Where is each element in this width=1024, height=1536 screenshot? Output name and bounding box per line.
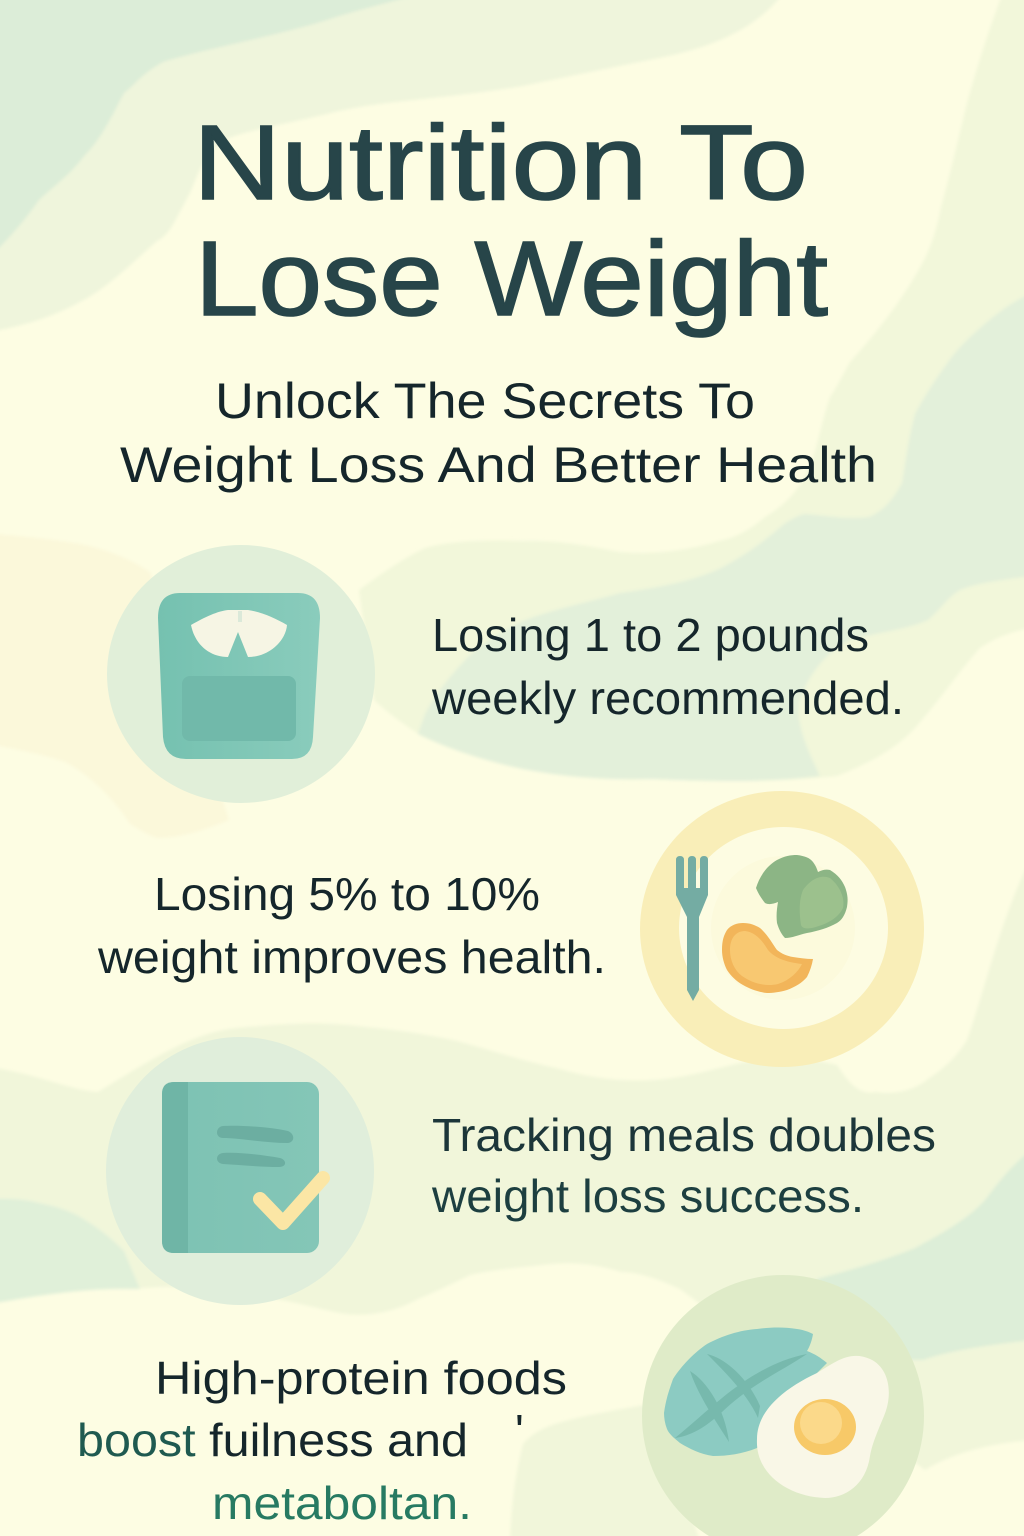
subtitle <box>120 373 877 493</box>
text: protein: boost fuilness and <box>77 1414 468 1466</box>
icon: food journal with check <box>106 1037 374 1305</box>
text: health: weight improves health. <box>97 931 606 983</box>
text: tracking: Tracking meals doubles <box>432 1109 936 1161</box>
title <box>193 104 828 338</box>
text: weekly loss: weekly recommended. <box>431 672 904 724</box>
fork <box>676 856 708 1001</box>
text: protein: High-protein foods <box>155 1352 567 1404</box>
text: weekly loss: Losing 1 to 2 pounds <box>432 609 869 661</box>
text: tracking: weight loss success. <box>431 1170 864 1222</box>
title: Nutrition To <box>193 104 808 222</box>
icon: plate with fork and food <box>640 791 924 1067</box>
text: tracking <box>431 1109 936 1222</box>
text: weekly loss <box>431 609 904 724</box>
text: protein: metaboltan. <box>212 1477 472 1529</box>
icon: leaf and fried egg <box>642 1275 924 1536</box>
title: Lose Weight <box>195 220 828 338</box>
text: protein: ' <box>515 1405 524 1457</box>
text: protein <box>77 1352 567 1529</box>
icon: weighing scale <box>107 545 375 803</box>
squash slice <box>722 923 813 993</box>
vegetables <box>756 855 848 938</box>
text: health: Losing 5% to 10% <box>154 868 540 920</box>
subtitle: Weight Loss And Better Health <box>120 437 877 493</box>
text: health <box>97 868 606 983</box>
subtitle: Unlock The Secrets To <box>215 373 755 429</box>
